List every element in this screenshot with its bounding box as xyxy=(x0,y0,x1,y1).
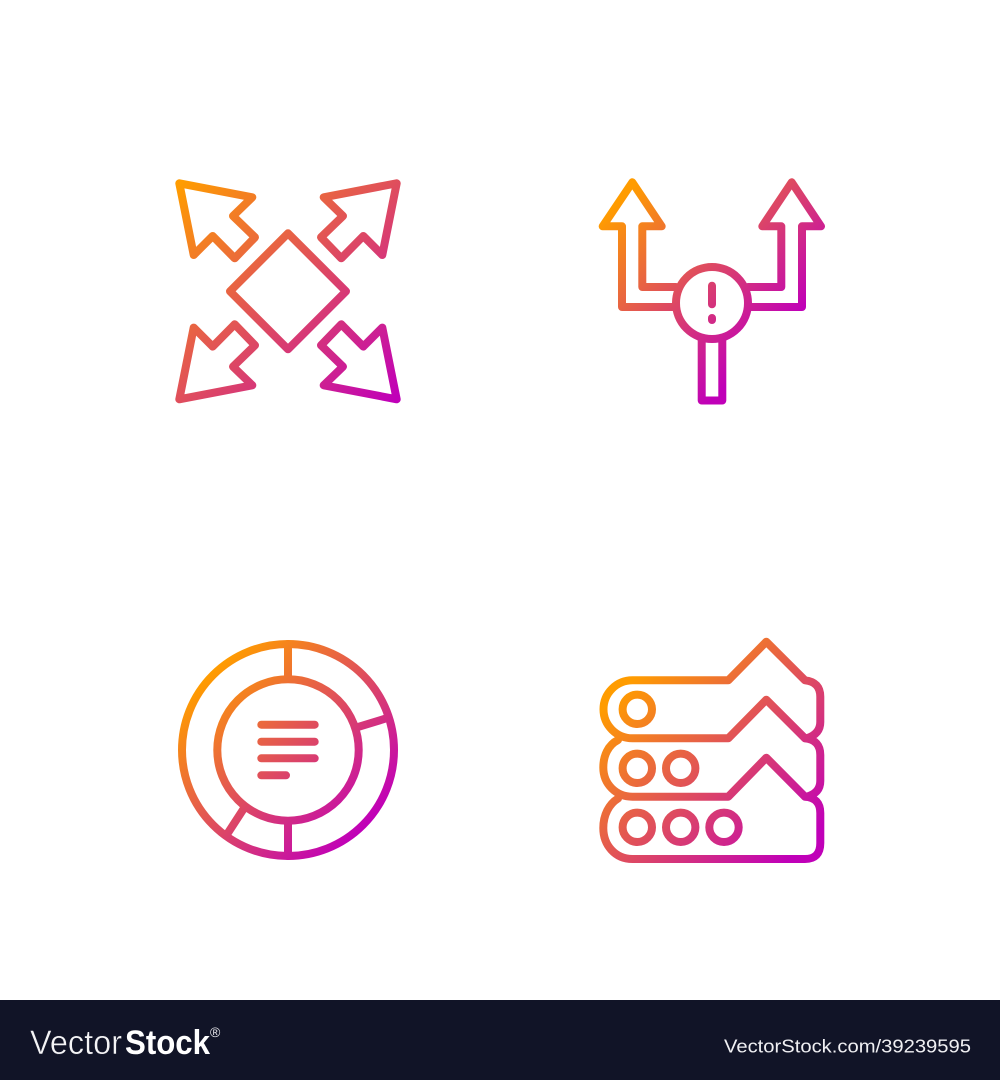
footer image id: VectorStock.com/39239595 xyxy=(724,1036,971,1056)
arrow: bottom left xyxy=(179,324,255,399)
indicator dots xyxy=(623,695,652,724)
bottom row xyxy=(603,797,820,859)
exclamation circle xyxy=(676,267,748,339)
left arrow xyxy=(603,182,676,307)
exclamation mark xyxy=(708,286,716,320)
icon: split arrows with exclamation circle xyxy=(603,182,821,400)
text lines xyxy=(261,725,315,775)
middle row xyxy=(603,738,820,797)
arrow: top left xyxy=(179,183,255,258)
icon: stacked server rows with up arrows xyxy=(603,642,820,859)
inner ring xyxy=(217,679,359,821)
registered mark: ® xyxy=(210,1024,221,1040)
footer bar xyxy=(0,1000,1000,1080)
center diamond xyxy=(230,233,346,349)
icon: diamond with four outward arrows xyxy=(179,183,397,399)
footer logo: Vector xyxy=(30,1024,122,1062)
outer ring xyxy=(182,644,394,856)
stem xyxy=(702,340,722,400)
right arrow xyxy=(748,182,821,307)
top row xyxy=(604,642,820,738)
arrow: top right xyxy=(321,183,397,258)
arrow: bottom right xyxy=(321,324,397,399)
footer logo bold part: Stock xyxy=(125,1024,210,1062)
ring dividers xyxy=(228,644,388,856)
icon: donut chart with text lines xyxy=(182,644,394,856)
